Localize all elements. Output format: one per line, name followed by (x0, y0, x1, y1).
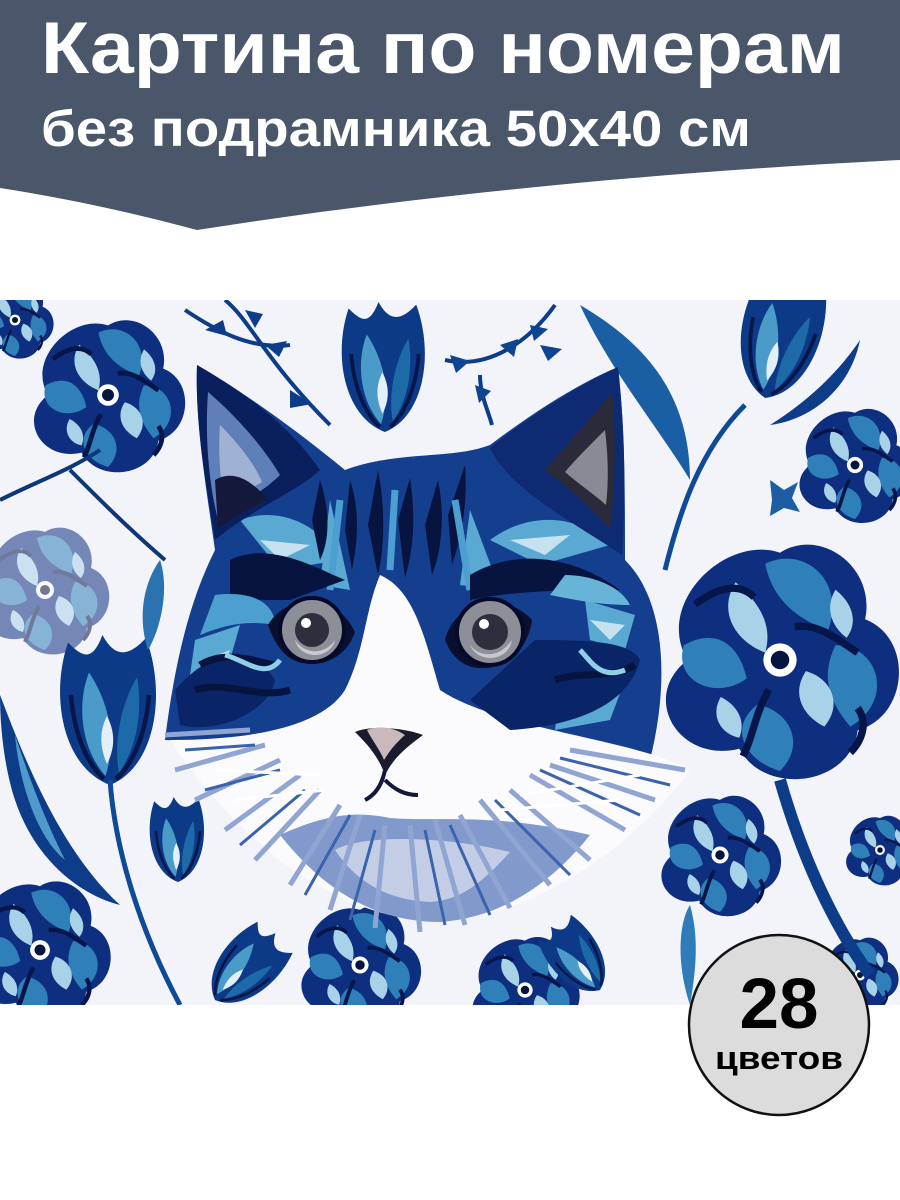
cat head (0, 0, 690, 932)
flowers and tulips (0, 266, 900, 1045)
subtitle: без подрамника 50х40 см (41, 100, 751, 157)
title: Картина по номерам (41, 8, 845, 89)
nose and mouth (355, 728, 423, 800)
left ear (197, 365, 320, 540)
whisker fringe (0, 0, 170, 740)
number: 28 (740, 965, 818, 1044)
right eye (445, 599, 532, 668)
badge: 28 colours (689, 935, 869, 1115)
cheek and side markings (230, 553, 620, 600)
right ear (490, 367, 624, 555)
forehead stripes (312, 465, 466, 578)
caption: цветов (715, 1040, 843, 1076)
header banner (0, 0, 900, 230)
painterly fur patches (190, 500, 635, 730)
chin shading (280, 815, 590, 922)
muzzle white (170, 575, 690, 922)
left eye (268, 598, 355, 664)
fur base (165, 365, 661, 760)
